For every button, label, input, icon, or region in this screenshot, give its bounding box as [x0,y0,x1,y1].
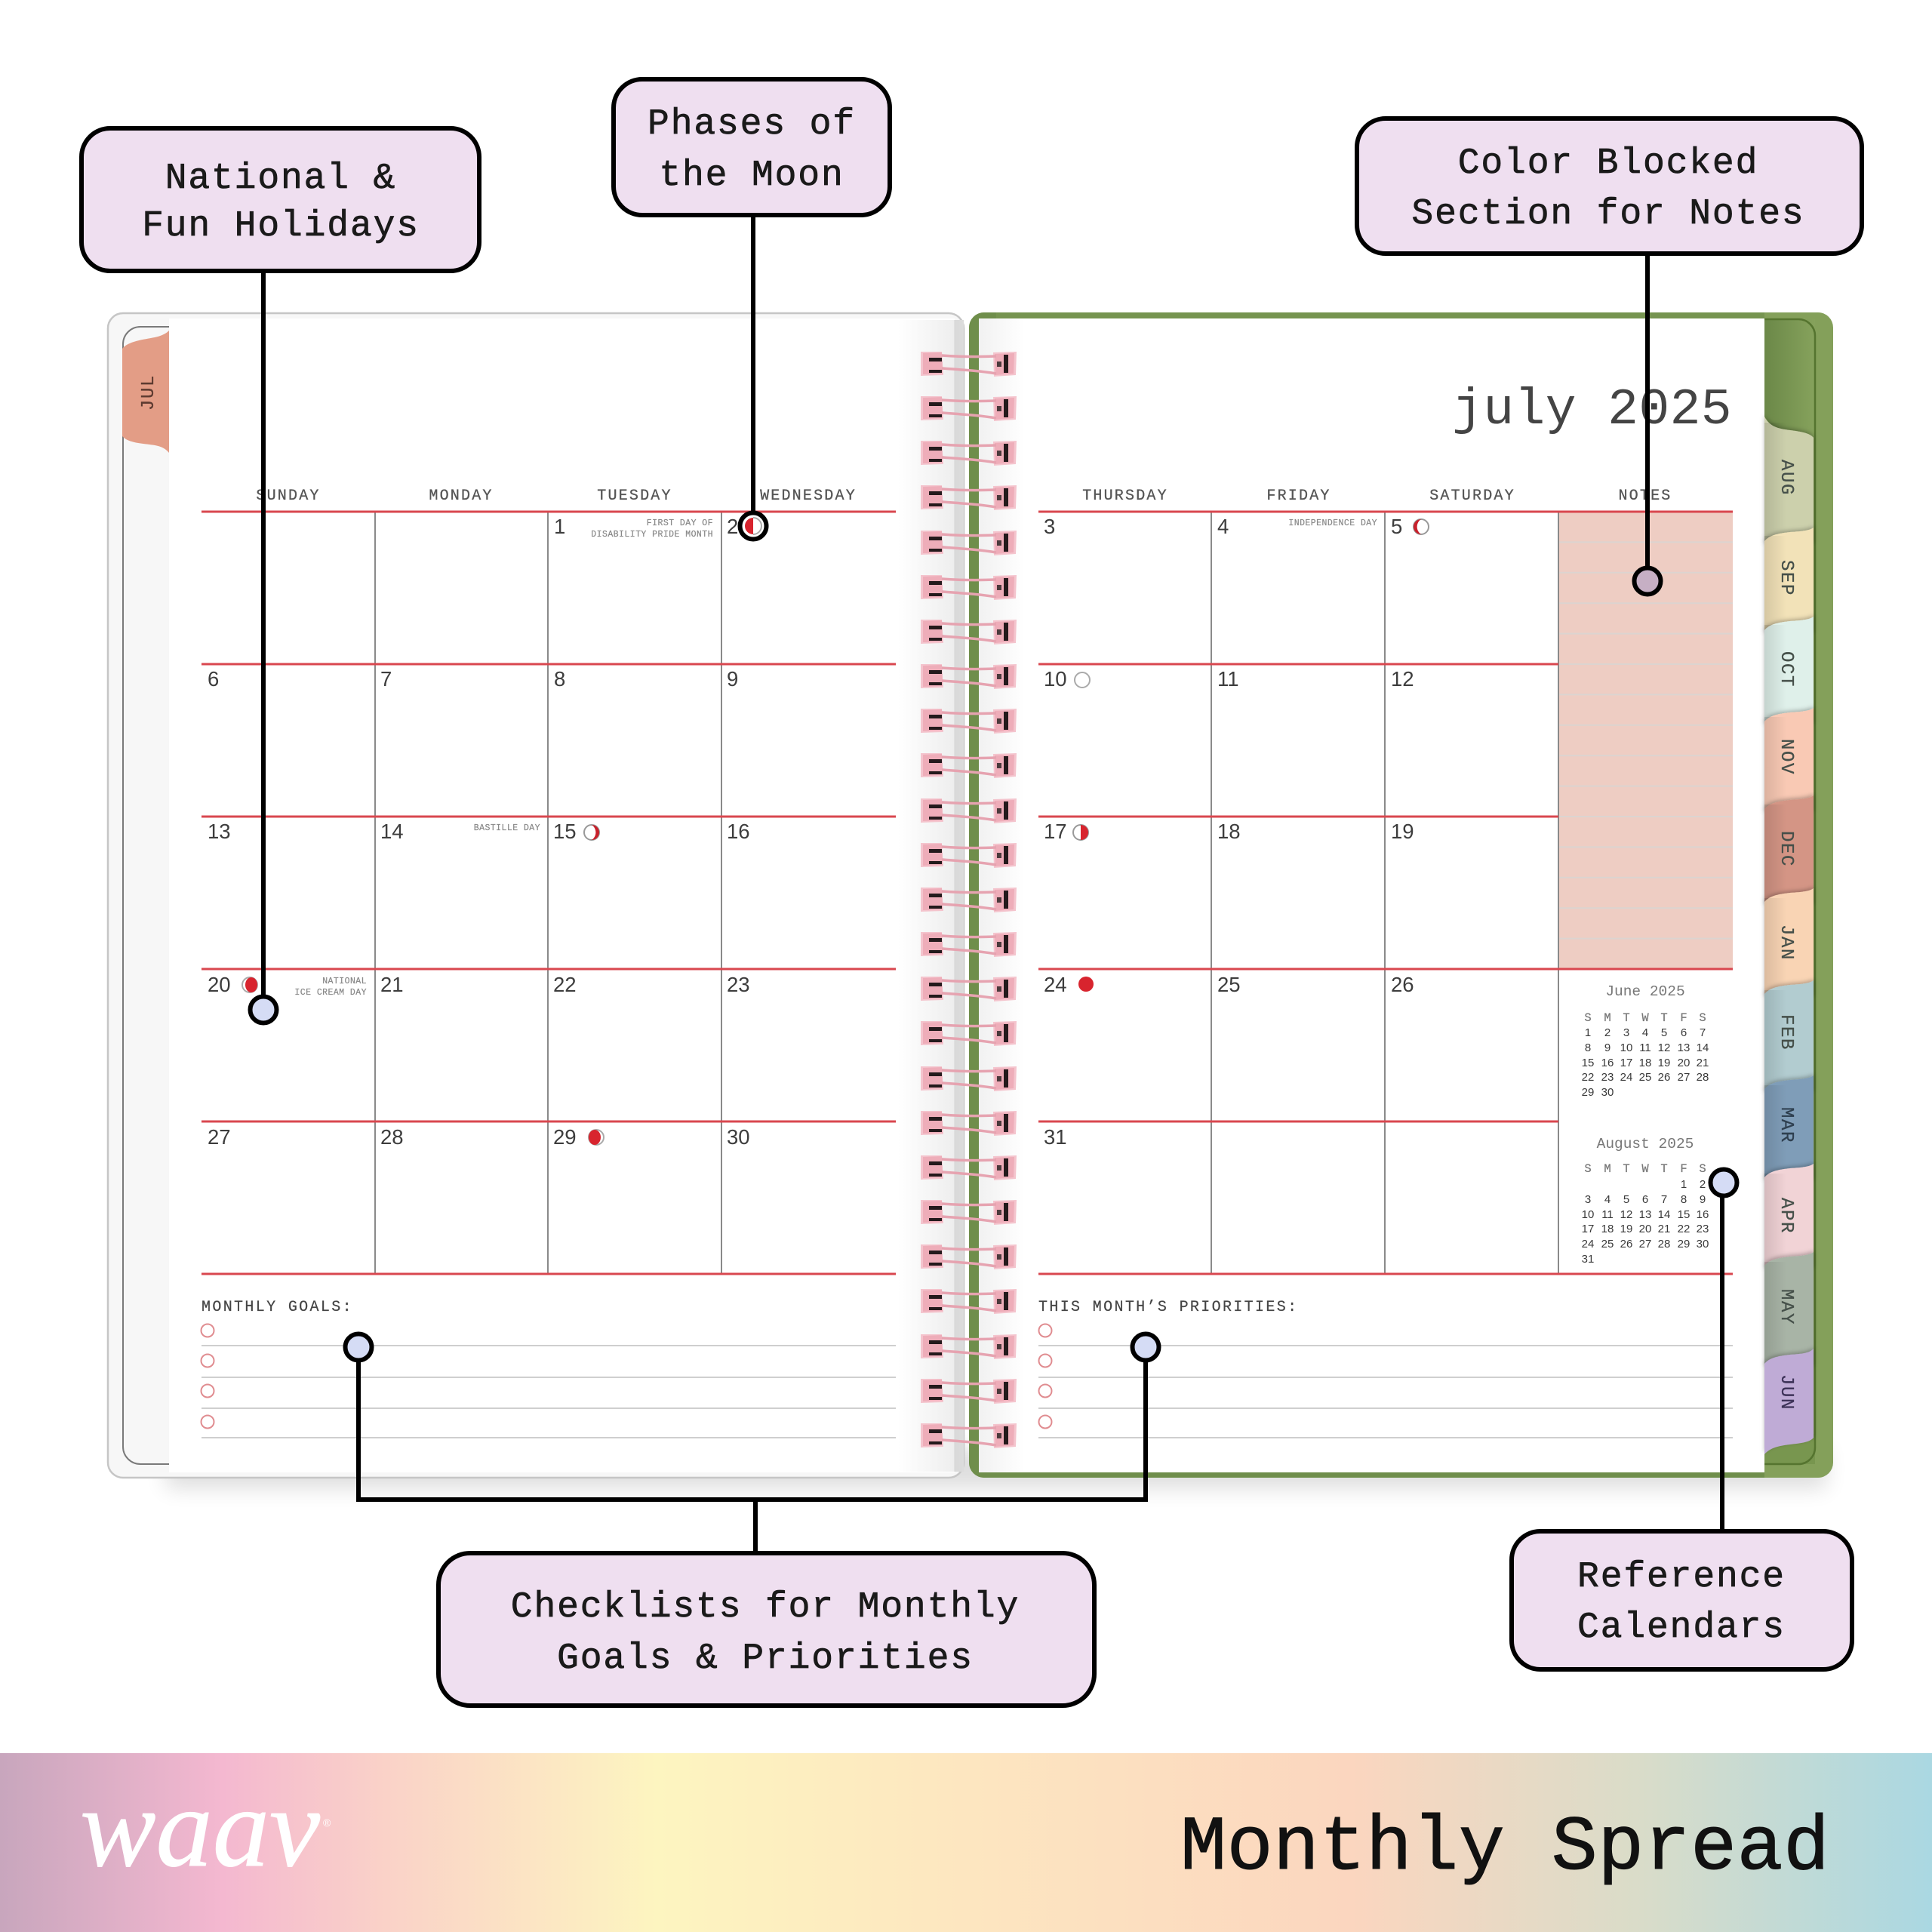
reference calendar: August 2025: M [1604,1162,1611,1176]
checklist: priorities: THIS MONTH’S PRIORITIES: [1038,1299,1298,1316]
reference calendar: June 2025: 20 [1678,1057,1690,1069]
notes block [1558,512,1733,969]
reference calendar: August 2025: 31 [1582,1253,1594,1266]
callout: Reference Calendars: Reference [1577,1557,1786,1598]
dates right: 24 [1044,973,1067,996]
dates left: 23 [727,973,750,996]
dates left: 28 [380,1125,404,1149]
tab: DEC: DEC [1776,831,1796,867]
callout: Phases of the Moon: Phases of [648,104,856,145]
weekday headers left [256,488,857,505]
reference calendar: August 2025: 26 [1620,1238,1632,1251]
reference calendar: August 2025: 4 [1604,1193,1611,1206]
callout: Checklists for Monthly Goals & Priorities: Checklists for Monthly [511,1587,1020,1628]
callout: Reference Calendars: Calendars [1577,1607,1786,1648]
reference calendar: June 2025: 1 [1585,1026,1591,1039]
reference calendar: June 2025: 24 [1620,1071,1632,1084]
weekday headers left: TUESDAY [597,488,672,505]
month tabs [1764,417,1814,1454]
dates right: 10 [1044,667,1067,691]
dates left: 29 [553,1125,577,1149]
dates right: 26 [1391,973,1414,996]
dates right: 5 [1391,515,1402,538]
dates right: 31 [1044,1125,1067,1149]
reference calendar: August 2025: 18 [1601,1223,1614,1235]
callout: Checklists for Monthly Goals & Priorities [346,1334,1159,1706]
reference calendar: August 2025: 3 [1585,1193,1591,1206]
reference calendar: June 2025: 23 [1601,1071,1614,1084]
reference calendar: August 2025 [1582,1136,1709,1266]
holiday notes left: DISABILITY PRIDE MONTH [591,530,713,540]
holiday notes left: FIRST DAY OF [647,518,713,528]
dates left: 1 [554,515,565,538]
reference calendar: June 2025: 13 [1678,1041,1690,1054]
dates left: 20 [208,973,231,996]
tab: JUN: JUN [1776,1374,1796,1411]
holiday notes left: NATIONAL [322,977,367,986]
dates left: 30 [727,1125,750,1149]
dates left: 13 [208,820,231,843]
reference calendar: August 2025: 27 [1639,1238,1651,1251]
dates right: 19 [1391,820,1414,843]
heading: Monthly Spread: Monthly Spread [1180,1804,1829,1892]
tab: JUL: JUL [139,374,159,411]
tab: OCT: OCT [1776,651,1796,688]
callout: National & Fun Holidays: Fun Holidays [142,206,420,247]
dates right: 18 [1217,820,1241,843]
reference calendar: June 2025: S [1699,1011,1706,1025]
reference calendar: August 2025: 6 [1642,1193,1648,1206]
reference calendar: June 2025: 2 [1604,1026,1611,1039]
reference calendar: June 2025: S [1584,1011,1592,1025]
weekday headers right: THURSDAY [1082,488,1168,505]
reference calendar: August 2025: 28 [1658,1238,1670,1251]
dates right: 11 [1217,667,1239,691]
reference calendar: June 2025: T [1623,1011,1630,1025]
reference calendar: August 2025: 10 [1582,1208,1594,1221]
reference calendar: August 2025: 17 [1582,1223,1594,1235]
panel: right planner cover and page [969,312,1833,1478]
tab: JUN [1764,1349,1814,1454]
reference calendar: August 2025: 12 [1620,1208,1632,1221]
tab: JUL [122,331,169,453]
reference calendar: June 2025: 8 [1585,1041,1591,1054]
reference calendar: June 2025 [1582,983,1709,1099]
dates left: 15 [553,820,577,843]
reference calendar: June 2025: 14 [1697,1041,1709,1054]
reference calendar: June 2025: 28 [1697,1071,1709,1084]
checklist: monthly goals [201,1299,896,1438]
weekday headers left: MONDAY [429,488,494,505]
reference calendar: August 2025: 29 [1678,1238,1690,1251]
reference calendar: August 2025: 21 [1658,1223,1670,1235]
tab: APR: APR [1776,1198,1796,1234]
tab: DEC [1764,795,1814,906]
reference calendar: August 2025: W [1641,1162,1649,1176]
weekday headers right: FRIDAY [1266,488,1331,505]
reference calendar: August 2025: F [1680,1162,1687,1176]
callout: National & Fun Holidays [82,128,479,1023]
reference calendar: June 2025: 18 [1639,1057,1651,1069]
dates left [208,515,750,1149]
dates left: 6 [208,667,219,691]
reference calendar: June 2025: M [1604,1011,1611,1025]
reference calendar: August 2025: 7 [1661,1193,1667,1206]
moon: day 24 [1078,977,1094,992]
tab: APR [1764,1164,1814,1269]
reference calendar: August 2025: 16 [1697,1208,1709,1221]
reference calendar: June 2025: 10 [1620,1041,1632,1054]
tab: SEP [1764,528,1814,634]
moon: day 17 [1073,825,1088,840]
reference calendar: August 2025: 20 [1639,1223,1651,1235]
reference calendar: August 2025: 1 [1681,1178,1687,1191]
holiday notes left [294,518,713,998]
dates left: 8 [554,667,565,691]
reference calendar: August 2025: T [1623,1162,1630,1176]
reference calendar: June 2025: F [1680,1011,1687,1025]
reference calendar: August 2025: 14 [1658,1208,1670,1221]
reference calendar: June 2025: 16 [1601,1057,1614,1069]
dates right: 12 [1391,667,1414,691]
reference calendar: August 2025: 15 [1678,1208,1690,1221]
calendar grid: left page [202,488,896,1274]
reference calendar: June 2025: 9 [1604,1041,1611,1054]
callout: Phases of the Moon: the Moon [659,155,844,196]
tab: FEB [1764,980,1814,1093]
dates left: 7 [380,667,392,691]
reference calendar: August 2025: T [1660,1162,1668,1176]
reference calendar: June 2025: 6 [1681,1026,1687,1039]
tab: JAN: JAN [1776,924,1796,961]
holiday notes left: BASTILLE DAY [474,823,540,833]
checklist: monthly goals: MONTHLY GOALS: [202,1299,353,1316]
callout: Checklists for Monthly Goals & Priorities: Goals & Priorities [557,1638,974,1679]
reference calendar: June 2025: 11 [1639,1041,1651,1054]
reference calendar: June 2025: 17 [1620,1057,1632,1069]
callout: Color Blocked Section for Notes [1357,118,1862,595]
callout: Phases of the Moon [614,79,890,539]
moon: day 20 [242,977,257,992]
holiday note right: INDEPENDENCE DAY [1288,518,1377,528]
reference calendar: June 2025: 5 [1661,1026,1667,1039]
reference calendar: June 2025: 15 [1582,1057,1594,1069]
dates left: 9 [727,667,738,691]
reference calendar: August 2025: 19 [1620,1223,1632,1235]
logo: waav: ® [323,1817,331,1829]
reference calendar: June 2025: 19 [1658,1057,1670,1069]
reference calendar: August 2025: S [1699,1162,1706,1176]
tab: MAY: MAY [1776,1289,1796,1325]
weekday headers right: SATURDAY [1429,488,1515,505]
dates left: 22 [553,973,577,996]
dates left: 2 [727,515,738,538]
calendar grid: right page [1038,488,1733,1274]
tab: FEB: FEB [1776,1014,1796,1051]
tab: MAY [1764,1252,1814,1367]
reference calendar: June 2025: June 2025 [1605,983,1685,1000]
reference calendar: June 2025: 30 [1601,1086,1614,1099]
reference calendar: June 2025: 12 [1658,1041,1670,1054]
reference calendar: June 2025: 4 [1642,1026,1648,1039]
checklist: priorities [1038,1299,1733,1438]
reference calendar: June 2025: 21 [1697,1057,1709,1069]
reference calendar: August 2025: 22 [1678,1223,1690,1235]
reference calendar: June 2025: W [1641,1011,1649,1025]
dates left: 16 [727,820,750,843]
reference calendar: August 2025: 9 [1700,1193,1706,1206]
tab: NOV: NOV [1776,739,1796,775]
reference calendar: June 2025: 7 [1700,1026,1706,1039]
reference calendar: August 2025: 5 [1623,1193,1629,1206]
tab: OCT [1764,617,1814,725]
footer band [0,1753,1932,1932]
weekday headers left: WEDNESDAY [760,488,857,505]
reference calendar: August 2025: 25 [1601,1238,1614,1251]
tab: MAR [1764,1075,1814,1181]
reference calendar: August 2025: 2 [1700,1178,1706,1191]
dates left: 21 [380,973,404,996]
tab: NOV [1764,708,1814,813]
reference calendar: August 2025: 11 [1601,1208,1614,1221]
reference calendar: June 2025: 29 [1582,1086,1594,1099]
callout: Color Blocked Section for Notes: Color Blocked [1458,143,1758,184]
tab: SEP: SEP [1776,560,1796,596]
tab: JAN [1764,888,1814,998]
holiday notes left: ICE CREAM DAY [294,988,367,998]
dates left: 14 [380,820,404,843]
dates right: 25 [1217,973,1241,996]
callout: National & Fun Holidays: National & [165,158,396,199]
dates right [1044,515,1414,1149]
tab: MAR: MAR [1776,1107,1796,1143]
tab: AUG [1764,417,1814,545]
moon: day 5 [1414,519,1429,534]
reference calendar: June 2025: 26 [1658,1071,1670,1084]
dates right: 17 [1044,820,1067,843]
weekday headers right: NOTES [1618,488,1672,505]
reference calendar: August 2025: 13 [1639,1208,1651,1221]
spiral binding [921,352,1017,1448]
panel: left planner cover and page [108,313,964,1478]
dates right: 4 [1217,515,1229,538]
weekday headers right [1082,488,1672,505]
tab: AUG: AUG [1776,460,1796,496]
callout: Reference Calendars [1512,1170,1852,1669]
callout: Color Blocked Section for Notes: Section for Notes [1411,194,1805,235]
reference calendar: August 2025: 30 [1697,1238,1709,1251]
reference calendar: August 2025: 8 [1681,1193,1687,1206]
moon: day 29 [589,1130,604,1145]
dates right: 3 [1044,515,1055,538]
moon: day 10 [1075,672,1090,688]
planner shadow [166,1449,1826,1488]
heading: july 2025: july 2025 [1452,381,1732,439]
reference calendar: August 2025: 23 [1697,1223,1709,1235]
weekday headers left: SUNDAY [256,488,321,505]
reference calendar: June 2025: 27 [1678,1071,1690,1084]
reference calendar: August 2025: August 2025 [1597,1136,1694,1152]
reference calendar: June 2025: 25 [1639,1071,1651,1084]
reference calendar: August 2025: 24 [1582,1238,1594,1251]
moon: day 15 [584,825,599,840]
reference calendar: June 2025: 22 [1582,1071,1594,1084]
dates left: 27 [208,1125,231,1149]
reference calendar: June 2025: T [1660,1011,1668,1025]
reference calendar: June 2025: 3 [1623,1026,1629,1039]
moon: day 2 marker [740,513,767,539]
reference calendar: August 2025: S [1584,1162,1592,1176]
logo: waav: waav [80,1765,320,1890]
